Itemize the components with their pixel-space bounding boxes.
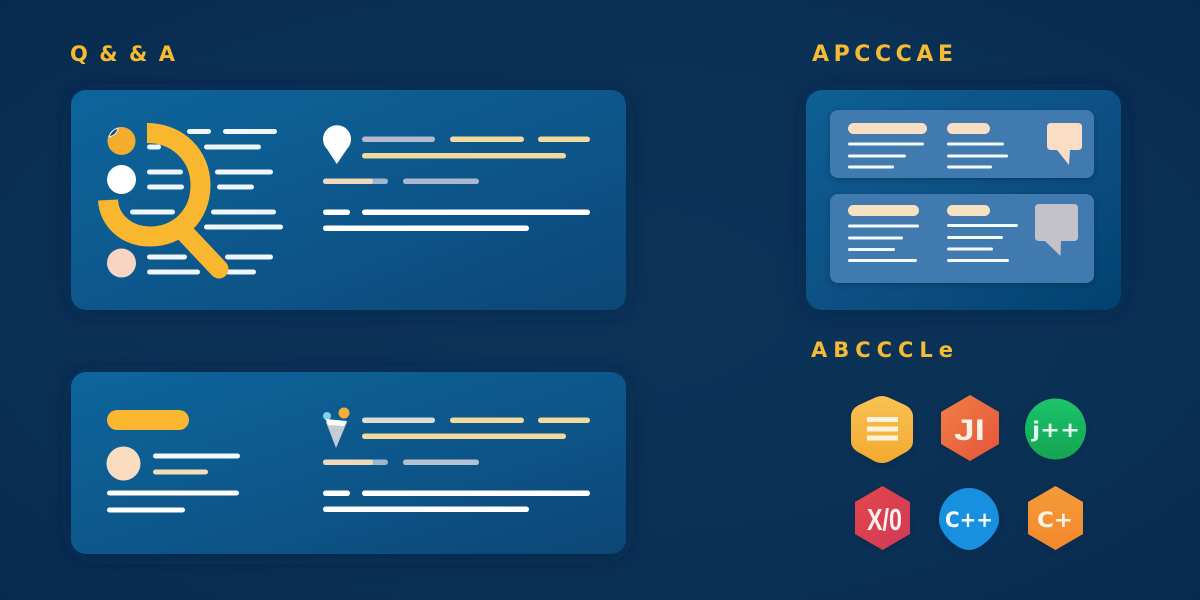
- icon: green j++ circle: [1025, 398, 1086, 460]
- icon: red X/0 hexagon: [855, 486, 910, 550]
- icon: blue C++ badge: [939, 488, 999, 550]
- icon: orange C+ hexagon: [1028, 486, 1083, 550]
- icon: orange JI hexagon: JI: [954, 414, 985, 447]
- icon: yellow menu badge: [851, 396, 913, 463]
- icon: green j++ circle: j++: [1031, 418, 1080, 442]
- icon: peach avatar: [106, 446, 140, 480]
- icon: grey speech bubble: [1035, 204, 1078, 256]
- panel: bottom left Q&A card: [71, 372, 626, 554]
- icon: orange JI hexagon: [941, 395, 999, 461]
- text lines: right block: [323, 418, 590, 512]
- card: lower: [830, 194, 1094, 283]
- icon: cone with dots: [323, 408, 350, 448]
- icon: red X/0 hexagon: X/0: [867, 502, 902, 537]
- panel: top left Q&A card: [71, 90, 626, 310]
- text lines: top right block: [323, 136, 590, 231]
- title: Q & & A: Q & & A: [70, 42, 176, 66]
- card: upper: [830, 110, 1094, 178]
- icon: peach speech bubble: [1047, 123, 1082, 165]
- icon: magnifier: [108, 133, 219, 269]
- text lines: left block: [107, 454, 240, 512]
- panel: right cards container: [806, 90, 1121, 310]
- list rows behind the magnifier: [130, 129, 283, 274]
- icon: blue C++ badge: C++: [945, 508, 993, 532]
- heading: ABCCCLE: ABCCCLe: [811, 338, 953, 362]
- icon: amber circle: [108, 127, 136, 155]
- icon: orange C+ hexagon: C+: [1037, 508, 1073, 532]
- icon: white circle: [107, 165, 136, 194]
- label pill: [107, 410, 189, 430]
- heading: APCCCAE: APCCCAE: [812, 42, 953, 67]
- icon: peach circle: [107, 248, 136, 278]
- icon: white location pin: [323, 125, 351, 164]
